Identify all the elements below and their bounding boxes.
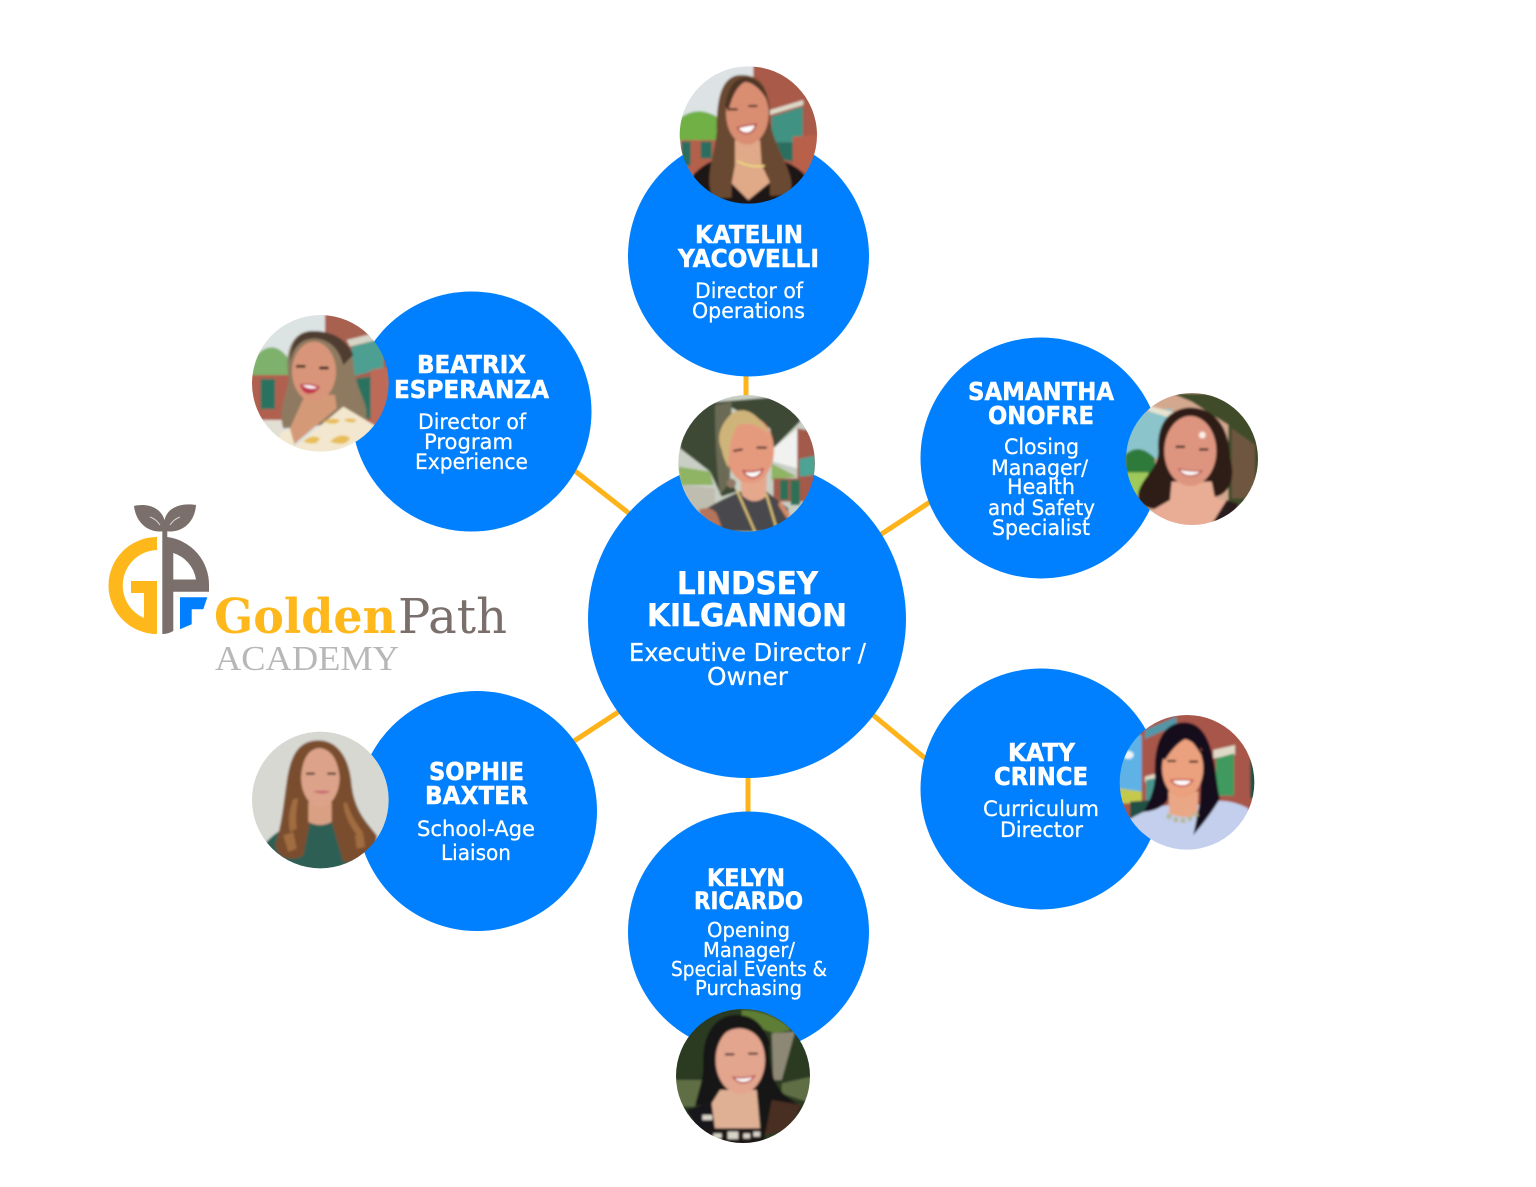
portrait <box>252 732 389 868</box>
circle <box>920 668 1162 910</box>
panel: Lindsey Kilgannon <box>588 392 906 778</box>
name <box>994 738 1088 791</box>
portrait <box>676 1009 810 1143</box>
name <box>968 377 1115 430</box>
role <box>988 435 1095 540</box>
name: KATELIN <box>695 220 803 249</box>
panel: Katy Crince <box>920 668 1260 910</box>
role: Executive Director / <box>629 638 867 667</box>
logo wordmark: Path: Path <box>398 589 507 645</box>
circle <box>920 338 1162 578</box>
name <box>394 350 550 404</box>
portrait <box>1120 715 1254 850</box>
logo: Golden Path Academy <box>108 504 507 678</box>
name: CRINCE <box>994 762 1088 791</box>
circle <box>357 691 597 931</box>
role: Closing <box>1004 435 1079 459</box>
role: Curriculum <box>983 797 1099 821</box>
portrait <box>1126 393 1258 525</box>
role <box>629 638 867 691</box>
role: Manager/ <box>703 938 795 962</box>
role <box>671 918 827 1000</box>
circle <box>628 136 869 376</box>
logo wordmark: Golden: Golden <box>214 589 396 645</box>
portrait <box>678 395 815 532</box>
role <box>692 279 805 323</box>
role: Purchasing <box>695 976 802 1000</box>
panel: Sophie Baxter <box>247 691 597 931</box>
name: SOPHIE <box>429 757 524 786</box>
circle <box>588 460 906 778</box>
role: Liaison <box>441 841 511 865</box>
name: KELYN <box>707 864 785 892</box>
role: Director of <box>695 279 804 303</box>
role <box>417 817 535 865</box>
role: Specialist <box>992 516 1090 540</box>
portrait <box>252 315 389 452</box>
role <box>983 797 1099 842</box>
name: BEATRIX <box>417 350 526 379</box>
role: Opening <box>707 918 790 942</box>
panel: Beatrix Esperanza <box>247 292 592 532</box>
role: Special Events & <box>671 957 827 981</box>
role: and Safety <box>988 496 1095 520</box>
role: Manager/ <box>991 456 1089 480</box>
organisation chart <box>108 66 1258 1143</box>
name: LINDSEY <box>677 566 819 602</box>
role: School-Age <box>417 817 535 841</box>
name <box>694 864 803 915</box>
name: BAXTER <box>425 781 528 810</box>
logo wordmark: Academy: ACADEMY <box>215 639 399 678</box>
name: RICARDO <box>694 887 803 915</box>
name: ONOFRE <box>988 401 1094 430</box>
role: Health <box>1007 475 1075 499</box>
name <box>677 220 819 273</box>
connector lines <box>568 370 936 818</box>
name: SAMANTHA <box>968 377 1115 406</box>
role: Director of <box>418 410 527 434</box>
name <box>425 757 528 810</box>
role: Program <box>424 430 513 454</box>
name: KILGANNON <box>647 598 847 634</box>
logo icon: GP sprout <box>108 504 209 634</box>
panel: Kelyn Ricardo <box>628 812 869 1148</box>
role: Director <box>1000 818 1083 842</box>
name: KATY <box>1008 738 1076 767</box>
name: YACOVELLI <box>677 244 819 273</box>
panel: Samantha Onofre <box>920 338 1265 578</box>
role: Experience <box>415 450 528 474</box>
panel: Katelin Yacovelli <box>628 62 869 377</box>
circle <box>352 292 592 532</box>
name <box>647 566 847 634</box>
role <box>415 410 528 474</box>
role: Operations <box>692 299 805 323</box>
name: ESPERANZA <box>394 375 550 404</box>
role: Owner <box>707 662 789 691</box>
circle <box>628 812 869 1052</box>
portrait <box>680 66 817 204</box>
